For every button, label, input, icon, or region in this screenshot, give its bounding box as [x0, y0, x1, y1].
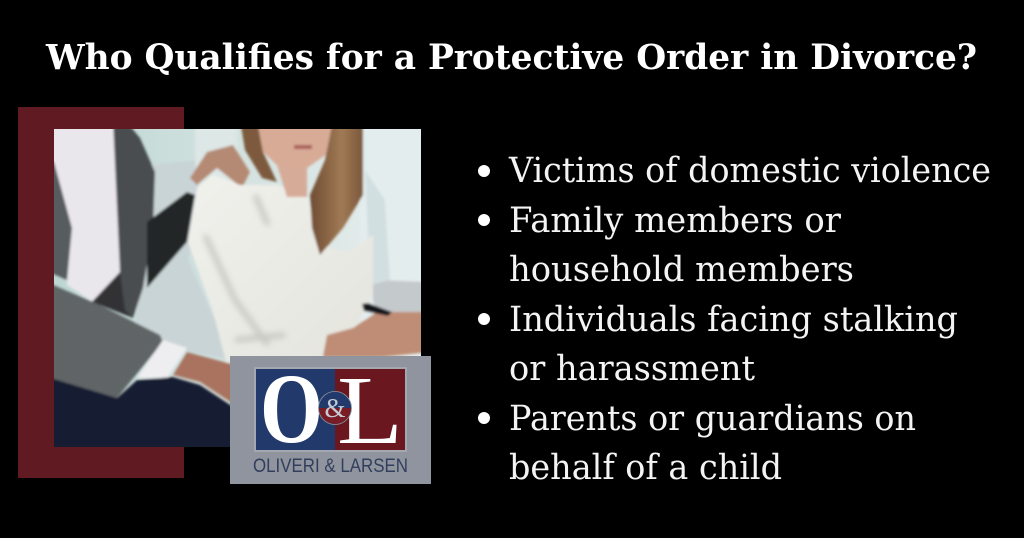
- man's shirt: [54, 129, 122, 303]
- jacket: [54, 160, 74, 281]
- bullet item: stalking: Individuals facing stalking: [509, 300, 958, 340]
- logo wordmark: OLIVERI & LARSEN: [253, 455, 408, 477]
- maroon frame block: [18, 107, 184, 478]
- bullet item: parents: [478, 399, 916, 488]
- sofa: [135, 160, 232, 360]
- woman's hand and pen: [323, 312, 430, 357]
- bullet item: family: Family members or: [509, 201, 841, 241]
- woman's shirt: [188, 175, 373, 362]
- hair: [240, 120, 277, 182]
- logo emblem: O: [260, 353, 323, 464]
- infographic canvas: [18, 42, 990, 484]
- bullet item: stalking: [478, 300, 958, 389]
- bullet item: stalking: or harassment: [509, 349, 755, 389]
- bullet item: family: [478, 201, 854, 290]
- face and neck: [277, 165, 307, 197]
- bullet item: parents: behalf of a child: [509, 448, 782, 488]
- cuff: [137, 340, 187, 378]
- title: Who Qualifies for a Protective Order in Divorce?: [45, 38, 977, 78]
- man's lower hand: [173, 352, 235, 405]
- logo emblem: &: [324, 393, 346, 423]
- logo emblem: [254, 353, 407, 464]
- bullet item: family: household members: [509, 250, 854, 290]
- bullet list: [478, 151, 991, 488]
- hand on shoulder: [190, 145, 250, 188]
- trousers: [54, 375, 230, 447]
- shirt folds: [205, 195, 285, 345]
- bullet item: parents: Parents or guardians on: [509, 399, 916, 439]
- logo: Oliveri & Larsen: [230, 353, 431, 484]
- man's arm: [147, 192, 195, 288]
- bullet item: victims: Victims of domestic violence: [508, 151, 991, 191]
- logo emblem: L: [337, 357, 403, 464]
- photo: couple on a sofa: [54, 129, 421, 447]
- tweed sleeve: [44, 281, 163, 398]
